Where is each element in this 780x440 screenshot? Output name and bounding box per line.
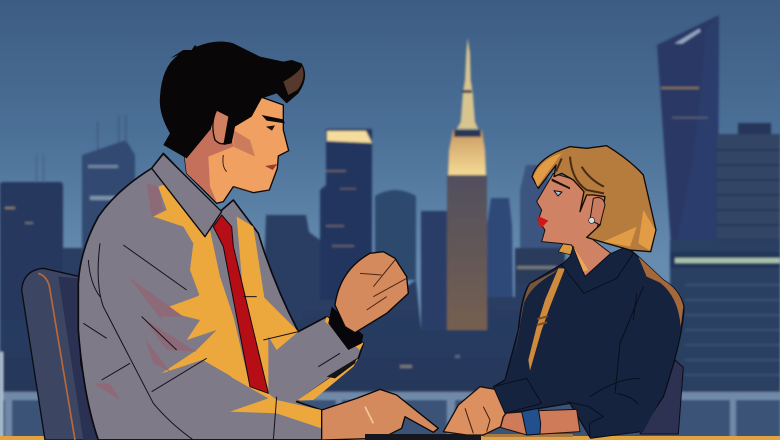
building: right grid tower bbox=[717, 123, 780, 259]
ear bbox=[213, 110, 230, 144]
lips bbox=[538, 216, 548, 228]
sleeve creases bbox=[83, 243, 340, 440]
eye and brow bbox=[262, 115, 285, 131]
sleeve end bbox=[567, 400, 660, 437]
neck and face bbox=[183, 97, 289, 203]
building: slim tower right of empire tower bbox=[487, 198, 513, 300]
neck and face bbox=[537, 173, 612, 277]
neck highlight bbox=[573, 247, 588, 272]
building: right foreground block bbox=[670, 240, 780, 396]
eye and brow bbox=[552, 178, 570, 196]
man bbox=[22, 41, 438, 440]
building: round top tower bbox=[375, 190, 416, 280]
bag strap bbox=[528, 268, 565, 371]
cheek shadow bbox=[233, 130, 255, 157]
lower city band bbox=[0, 280, 560, 396]
black cuff band bbox=[328, 307, 363, 350]
lower hand pointing bbox=[322, 389, 438, 440]
face shadow bbox=[183, 127, 233, 202]
tie bbox=[213, 215, 268, 393]
chair behind woman bbox=[640, 360, 683, 434]
shirt bbox=[493, 247, 684, 437]
building: dark block beside the empire tower bbox=[421, 211, 448, 351]
jaw crease bbox=[223, 155, 250, 192]
collar bbox=[562, 247, 633, 293]
shoulder highlight bbox=[638, 257, 683, 327]
hair highlight bbox=[283, 66, 304, 95]
building: left mid tower bbox=[82, 115, 135, 260]
woman bbox=[443, 146, 684, 438]
watch strap on sleeve bbox=[327, 358, 357, 378]
ear and earring bbox=[589, 197, 605, 225]
building: tower behind woman bbox=[515, 165, 565, 298]
hair light strands bbox=[533, 153, 655, 251]
hair bbox=[160, 41, 305, 158]
sleeve folds bbox=[567, 287, 643, 438]
table top bbox=[0, 434, 780, 440]
hair dark strands bbox=[556, 157, 604, 193]
collar bbox=[152, 154, 222, 237]
sleeve cuff bbox=[493, 378, 542, 413]
wristwatch bbox=[522, 408, 541, 435]
shirt yellow highlights bbox=[153, 177, 363, 428]
building: angled skyscraper bbox=[657, 15, 719, 260]
hair back wisp bbox=[558, 243, 573, 255]
forearm bbox=[487, 409, 580, 435]
building: low dark block bbox=[262, 215, 320, 340]
left edge highlight bbox=[513, 269, 558, 360]
building: far left tower bbox=[0, 155, 82, 398]
railing bbox=[0, 352, 780, 440]
tablet on table bbox=[365, 434, 481, 440]
building: lit crown tower bbox=[320, 129, 372, 300]
raised hand bbox=[335, 252, 408, 333]
hand bbox=[443, 387, 514, 435]
shirt pink shadows bbox=[93, 183, 197, 400]
mouth bbox=[265, 164, 277, 170]
chair behind man bbox=[22, 268, 100, 440]
shirt bbox=[78, 153, 363, 440]
hair bbox=[532, 146, 656, 252]
building: empire tower with spire bbox=[447, 38, 487, 331]
